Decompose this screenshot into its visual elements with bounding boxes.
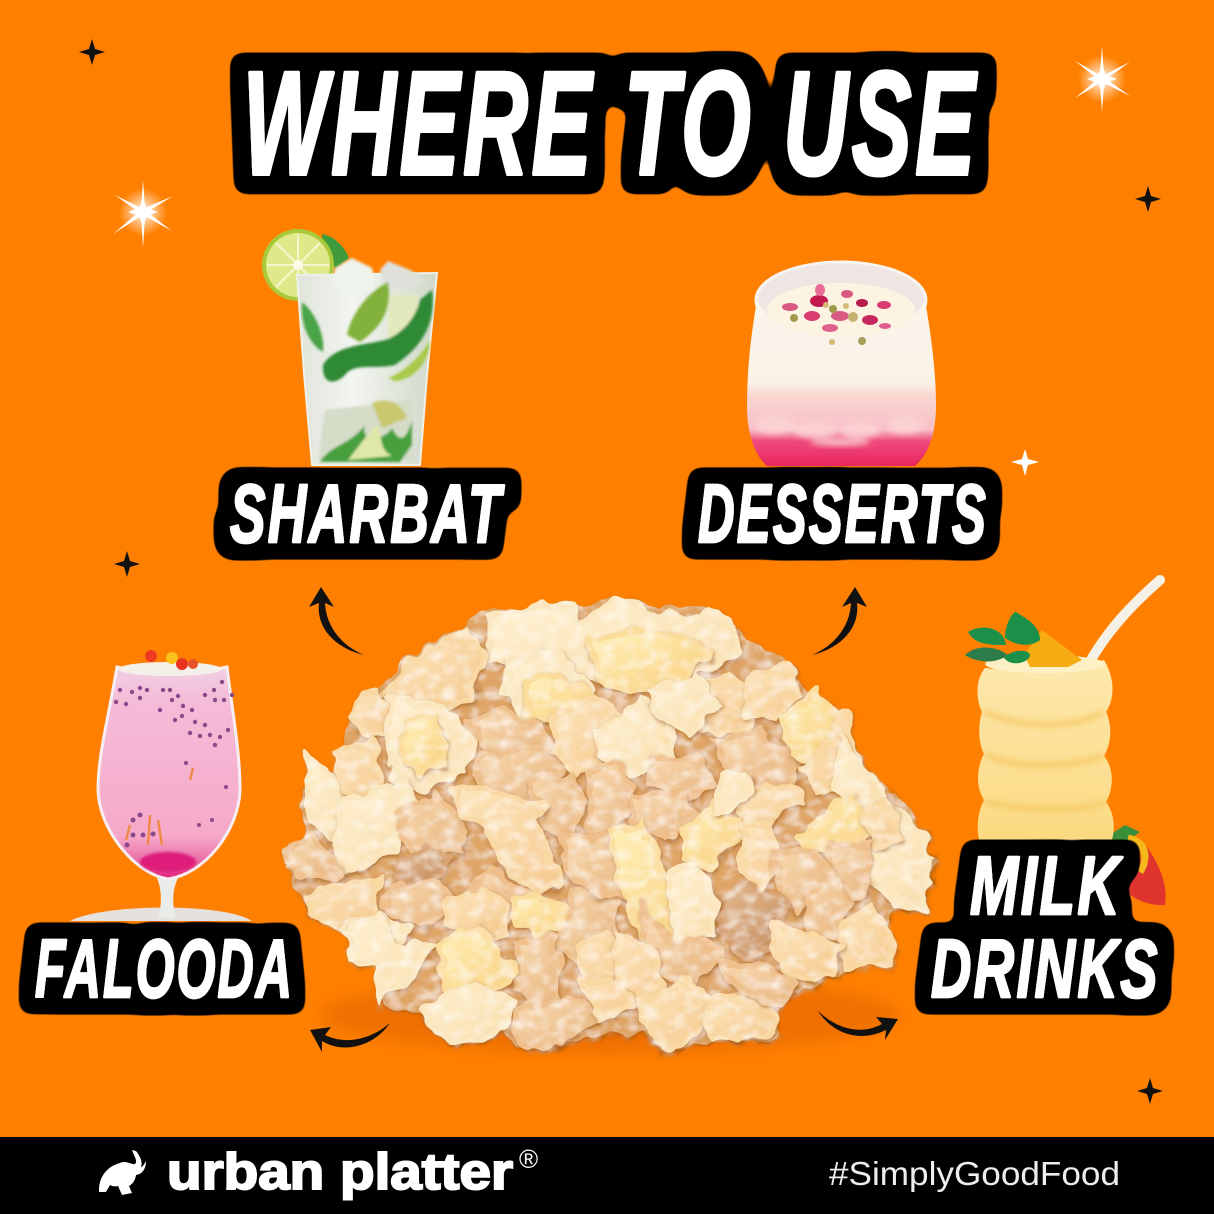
pile of gum crystals (285, 600, 932, 1050)
cup body (977, 660, 1114, 850)
strawberry (1127, 846, 1166, 905)
bowl (98, 667, 240, 879)
basil seeds (114, 680, 234, 848)
label: falooda: FALOODA (35, 922, 294, 1015)
straw (1092, 580, 1160, 658)
lime slice (262, 229, 334, 301)
pile base silhouette (288, 600, 932, 1050)
mango (1024, 630, 1082, 667)
arrow: to falooda (310, 1023, 390, 1052)
glass (297, 273, 437, 465)
drink: desserts (747, 262, 936, 466)
label: sharbat: SHARBAT (230, 467, 505, 560)
arrow: to milk drinks (818, 1011, 898, 1040)
label: milk drinks (931, 839, 1160, 1015)
rose petal toppings (782, 284, 891, 345)
glass rim (756, 262, 926, 338)
arrow: to desserts (812, 587, 867, 655)
layered body (747, 300, 936, 466)
footer bar (0, 1137, 1214, 1214)
crushed ice speckle (755, 416, 923, 446)
registered mark: ® (519, 1144, 538, 1174)
drink: milk drinks (965, 580, 1166, 905)
top cream and garnish (118, 650, 222, 676)
mint (965, 612, 1040, 663)
drink: falooda (70, 650, 252, 921)
hashtag: #SimplyGoodFood (829, 1155, 1120, 1192)
sparkles (79, 39, 1163, 1104)
drink: sharbat mojito (262, 229, 437, 465)
glass base (70, 908, 252, 921)
orange strands (126, 768, 193, 845)
cup swirl shading (984, 712, 1106, 810)
arrow: to sharbat (309, 587, 364, 655)
mojito contents (302, 258, 433, 462)
pile shadow (320, 977, 900, 1053)
label: milk drinks: MILK (970, 839, 1123, 932)
cream surface (767, 283, 915, 337)
brand name: urban platter (167, 1143, 513, 1200)
label: desserts: DESSERTS (698, 467, 988, 560)
icon: elephant logo (99, 1150, 146, 1195)
stem (157, 878, 178, 918)
mint sprig behind lime (322, 234, 349, 268)
